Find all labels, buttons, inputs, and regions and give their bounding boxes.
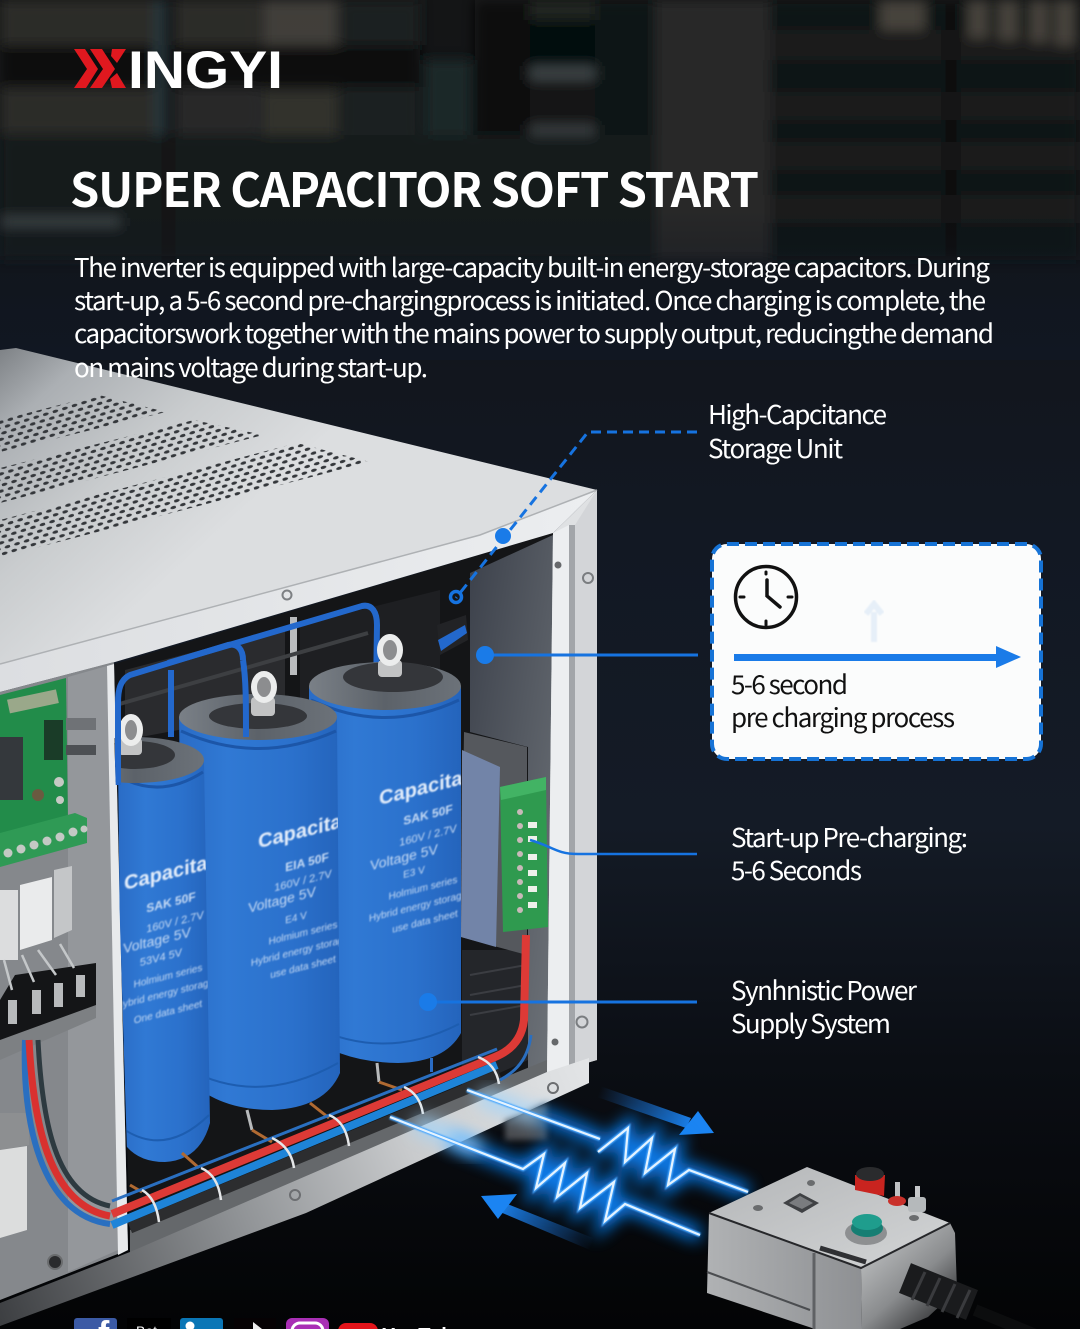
capacitor 3 label: Holmium series [389, 875, 457, 903]
label: storage unit [708, 395, 887, 466]
leader: storage unit [450, 432, 697, 602]
box connector [905, 1272, 1060, 1329]
label: start-up pre-charging [731, 818, 968, 888]
logo wordmark: INGYI [128, 41, 283, 100]
box top face [709, 1167, 950, 1268]
cabinet foot [505, 1103, 547, 1140]
capacitor 3 label: Hybrid energy storage [369, 889, 467, 925]
body text [74, 248, 994, 385]
capacitor 1 [114, 714, 210, 1162]
left wires [25, 1040, 110, 1224]
capacitor 1 label: One data sheet [134, 999, 202, 1027]
icon: tiktok [234, 1318, 276, 1329]
box left face [707, 1213, 862, 1329]
capacitor 3 label: Voltage 5V [370, 842, 438, 874]
glow blobs on rail [415, 1096, 540, 1148]
label: storage unit: High-Capcitance [708, 395, 887, 432]
box button: red [855, 1167, 885, 1196]
faint up arrow [866, 604, 882, 642]
capacitor 1 label: 160V / 2.7V [146, 909, 204, 936]
cabinet top face [0, 348, 597, 664]
leader: power supply [419, 993, 697, 1011]
card text: pre charging process [731, 698, 955, 735]
capacitor 1 label: SAK 50F [146, 890, 196, 916]
capacitor 3 label [368, 773, 461, 934]
box button: green [845, 1214, 887, 1245]
control box [707, 1167, 1060, 1329]
arrow: incoming [481, 1194, 593, 1250]
capacitor feet [130, 1063, 402, 1192]
terminal blocks [0, 944, 96, 1060]
vent perforations [0, 395, 370, 557]
title: SUPER CAPACITOR SOFT START [70, 152, 759, 221]
arrow: outgoing [597, 1086, 714, 1135]
wire bundle [112, 935, 531, 1228]
capacitor 3 label: Capacitance [379, 759, 497, 810]
bus bars back [116, 606, 377, 737]
cabinet illustration [0, 348, 597, 1326]
body text: capacitorswork together with the mains power to supply output, reducingthe demand [74, 314, 994, 351]
capacitor 2 label: 160V / 2.7V [274, 868, 332, 894]
label: start-up pre-charging: Start-up Pre-charging: [731, 818, 968, 855]
capacitor 2 label: use data sheet [270, 954, 336, 981]
capacitor 2 label: EIA 50F [285, 850, 329, 875]
card text: 5-6 second [731, 665, 848, 702]
left wall [0, 662, 128, 1300]
floor washer [48, 1255, 62, 1269]
rail back band [130, 1060, 547, 1254]
box switch: square [783, 1193, 819, 1213]
capacitor 2 label: Hybrid energy storage [251, 934, 349, 969]
left partition [68, 666, 118, 1272]
body text: start-up, a 5-6 second pre-chargingprocess is initiated. Once charging is complete, the [74, 281, 986, 318]
label: synergistic power [731, 971, 918, 1041]
relay bracket [437, 615, 468, 655]
social icons row [74, 1315, 465, 1329]
capacitor 3 label: SAK 50F [403, 802, 453, 828]
capacitor 1 label: 53V4 5V [140, 947, 183, 969]
card text [731, 665, 955, 735]
power module [461, 732, 527, 955]
leader: card [476, 646, 698, 664]
zip ties [142, 1057, 499, 1222]
card: pre-charging [712, 544, 1041, 759]
background: blurred building [0, 0, 1080, 260]
body text: The inverter is equipped with large-capacity built-in energy-storage capacitors. During [74, 248, 990, 285]
right wall inner [470, 535, 553, 1080]
capacitor 3 label: E3 V [403, 865, 425, 881]
capacitor 1 label: Voltage 5V [123, 925, 191, 957]
icon: youtube [338, 1323, 465, 1329]
box right face [861, 1223, 957, 1329]
logo mark [74, 49, 126, 88]
relays [0, 866, 72, 960]
label: storage unit: Storage Unit [708, 429, 843, 466]
cabinet front lip [0, 490, 597, 692]
capacitor 1 label [122, 858, 208, 1024]
background fade [0, 210, 1080, 360]
label: synergistic power: Synhnistic Power [731, 971, 918, 1008]
capacitor 2 [179, 660, 340, 1110]
lower left module [0, 1113, 29, 1238]
card panel [712, 544, 1041, 759]
bus bars front [118, 645, 243, 785]
timeline arrow [734, 646, 1021, 668]
icon: facebook [74, 1315, 117, 1329]
terminal strip [500, 777, 548, 932]
label: synergistic power: Supply System [731, 1004, 891, 1041]
icon: clock [736, 566, 796, 628]
leader lines [419, 432, 698, 1011]
capacitor 2 label: Holmium series [269, 920, 337, 948]
circuit board [0, 678, 96, 867]
bottom rail [0, 1058, 589, 1326]
capacitor 2 label: Voltage 5V [248, 884, 316, 917]
cabinet interior [114, 533, 553, 1250]
capacitor 2 label: Capacitance [258, 802, 376, 853]
capacitors [114, 602, 461, 1162]
icon: instagram [286, 1318, 329, 1329]
capacitor 3 label: use data sheet [392, 909, 458, 936]
capacitor 1 label: Hybrid energy storage [116, 977, 214, 1012]
right cabinet post [547, 490, 597, 1075]
capacitor 2 label: E4 V [285, 910, 307, 927]
capacitor 2 label [248, 816, 339, 979]
body text: on mains voltage during start-up. [74, 348, 428, 385]
capacitor 3 [309, 634, 461, 1072]
label: start-up pre-charging: 5-6 Seconds [731, 851, 862, 888]
box toggles [888, 1182, 926, 1212]
icon: x box [127, 1318, 171, 1329]
leader: start-up [530, 840, 697, 854]
energy flow arrows [481, 1086, 714, 1250]
box screws [753, 1180, 919, 1221]
icon: linkedin [180, 1318, 223, 1329]
capacitor 1 label: Holmium series [134, 963, 202, 991]
logo [74, 41, 283, 100]
capacitor 3 label: 160V / 2.7V [399, 823, 457, 849]
glowing circuit lines [390, 1090, 748, 1235]
capacitor 1 label: Capacitance [124, 844, 242, 895]
